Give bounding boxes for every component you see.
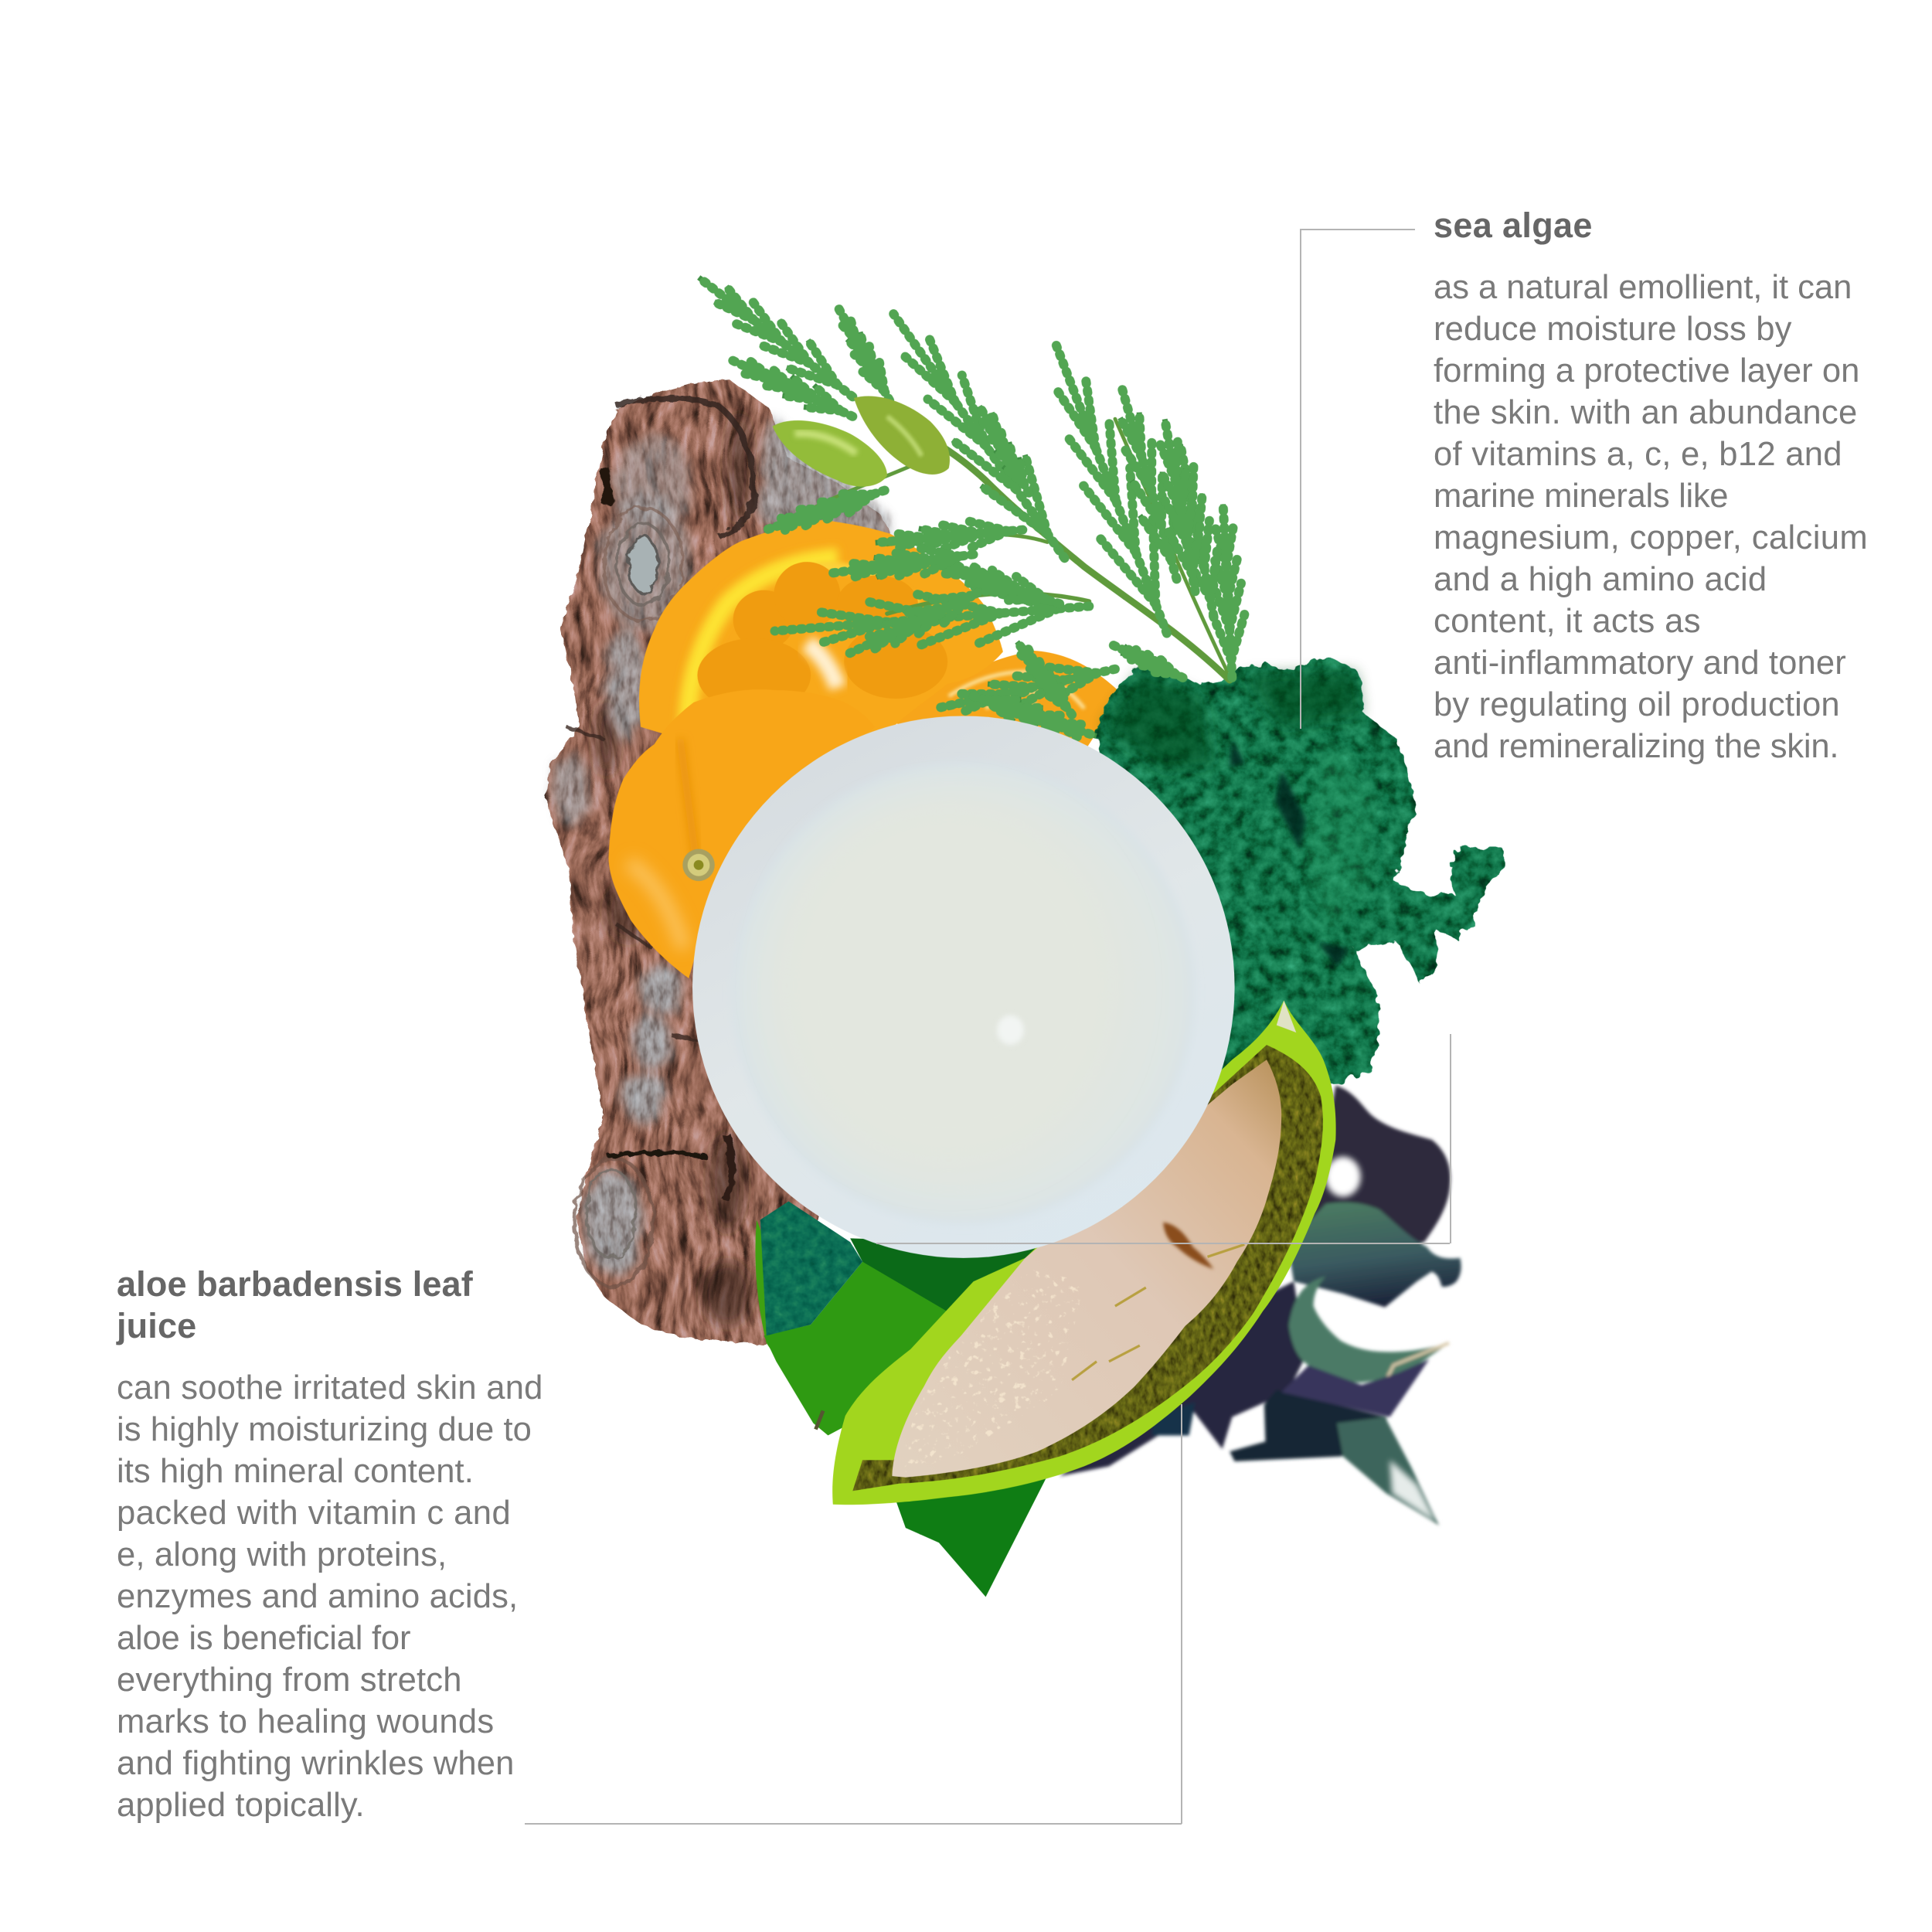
text: aloe description: applied topically. [117,1787,365,1824]
bark [546,379,889,1345]
green seeds [773,396,950,487]
orange white pith [807,643,838,688]
green lower tail [1337,1417,1439,1526]
jar lid [692,716,1235,1258]
heading: aloe barbadensis leaf juice [116,1264,473,1345]
dark seaweed [1060,1086,1461,1526]
text: sea algae description: and a high amino acid [1434,561,1767,598]
text: sea algae description: the skin. with an abundance [1434,394,1858,431]
text: aloe description: its high mineral content. [117,1453,474,1490]
text: sea algae description: reduce moisture loss by [1434,311,1792,348]
heading: sea algae: sea algae [1434,206,1593,245]
text: aloe description: packed with vitamin c and [117,1495,511,1532]
text: sea algae description: content, it acts as [1434,603,1701,640]
bark grey patches [552,413,889,1274]
connector: aloe vertical [1181,1404,1182,1824]
navy lower left [1060,1281,1306,1476]
dark lower body [1230,1389,1389,1461]
text: aloe description: marks to healing wounds [117,1703,494,1740]
navy upper mass [1306,1086,1451,1257]
algae dark crevices [1230,740,1349,968]
aloe tip [1277,1001,1296,1032]
heading: aloe barbadensis leaf juice: aloe barbadensis leaf [117,1264,473,1304]
teal flap [1287,1202,1461,1308]
bark dark patches [595,413,752,1326]
orange segments [697,562,947,713]
text: sea algae description: forming a protective layer on [1434,352,1859,389]
left seed [773,420,887,487]
aloe leaf slice [832,1001,1336,1505]
orange peel lower [609,689,875,978]
text: sea algae description: magnesium, copper, calcium [1434,519,1868,556]
text: aloe description: can soothe irritated skin and [117,1369,543,1406]
yellow pith [688,557,838,727]
mandarin orange pieces [609,520,1117,978]
text: sea algae description: anti-inflammatory and toner [1434,645,1846,682]
text: sea algae description: and remineralizing the skin. [1434,728,1838,765]
purple fold [1281,1359,1429,1417]
dark right [850,1238,1047,1331]
text: sea algae description: by regulating oil production [1434,686,1840,723]
text: sea algae description [1434,269,1868,765]
peeled top piece [639,520,1003,764]
text: sea algae description: as a natural emollient, it can [1434,269,1852,306]
connector: algae lower vertical [1450,1034,1451,1243]
orange stem dot [682,849,715,881]
rim [755,1219,832,1427]
connector: sea algae vertical [1300,229,1301,729]
bark knots and cracks [566,399,754,1287]
connector: algae lower horizontal [876,1243,1450,1244]
small right segment [893,651,1117,788]
connector: aloe horizontal [525,1823,1182,1824]
teal curl [1289,1277,1449,1383]
aloe flesh [892,1060,1281,1478]
aloe flesh sparkle [904,1269,1084,1472]
text: aloe description: e, along with proteins, [117,1536,447,1573]
bright band [764,1262,955,1435]
cypress sprig [688,264,1248,747]
cypress stems [788,417,1230,709]
text: sea algae description: marine minerals like [1434,478,1728,515]
aloe brown spot [1163,1223,1213,1269]
text: aloe description: aloe is beneficial for [117,1620,410,1657]
text: sea algae description: of vitamins a, c, e, b12 and [1434,436,1842,473]
text: aloe description: and fighting wrinkles when [117,1745,514,1782]
right seed [854,396,950,474]
aloe lime rim [832,1001,1336,1505]
text: aloe description [117,1369,543,1824]
small dark bit [1152,1402,1196,1435]
text: aloe description: everything from stretch [117,1662,462,1699]
teal flesh [760,1202,862,1335]
text: aloe description: enzymes and amino acids, [117,1578,518,1615]
lower aloe tip [893,1451,1060,1597]
connector: sea algae horizontal [1300,229,1415,230]
spirulina algae powder [1097,659,1503,1109]
heading: aloe barbadensis leaf juice: juice [117,1306,196,1345]
jar highlight [997,1015,1024,1045]
green aloe leaf behind [755,1202,1060,1597]
text: aloe description: is highly moisturizing due to [117,1411,532,1448]
aloe dark inner band [852,1045,1323,1491]
algae dark shading [1103,672,1213,770]
